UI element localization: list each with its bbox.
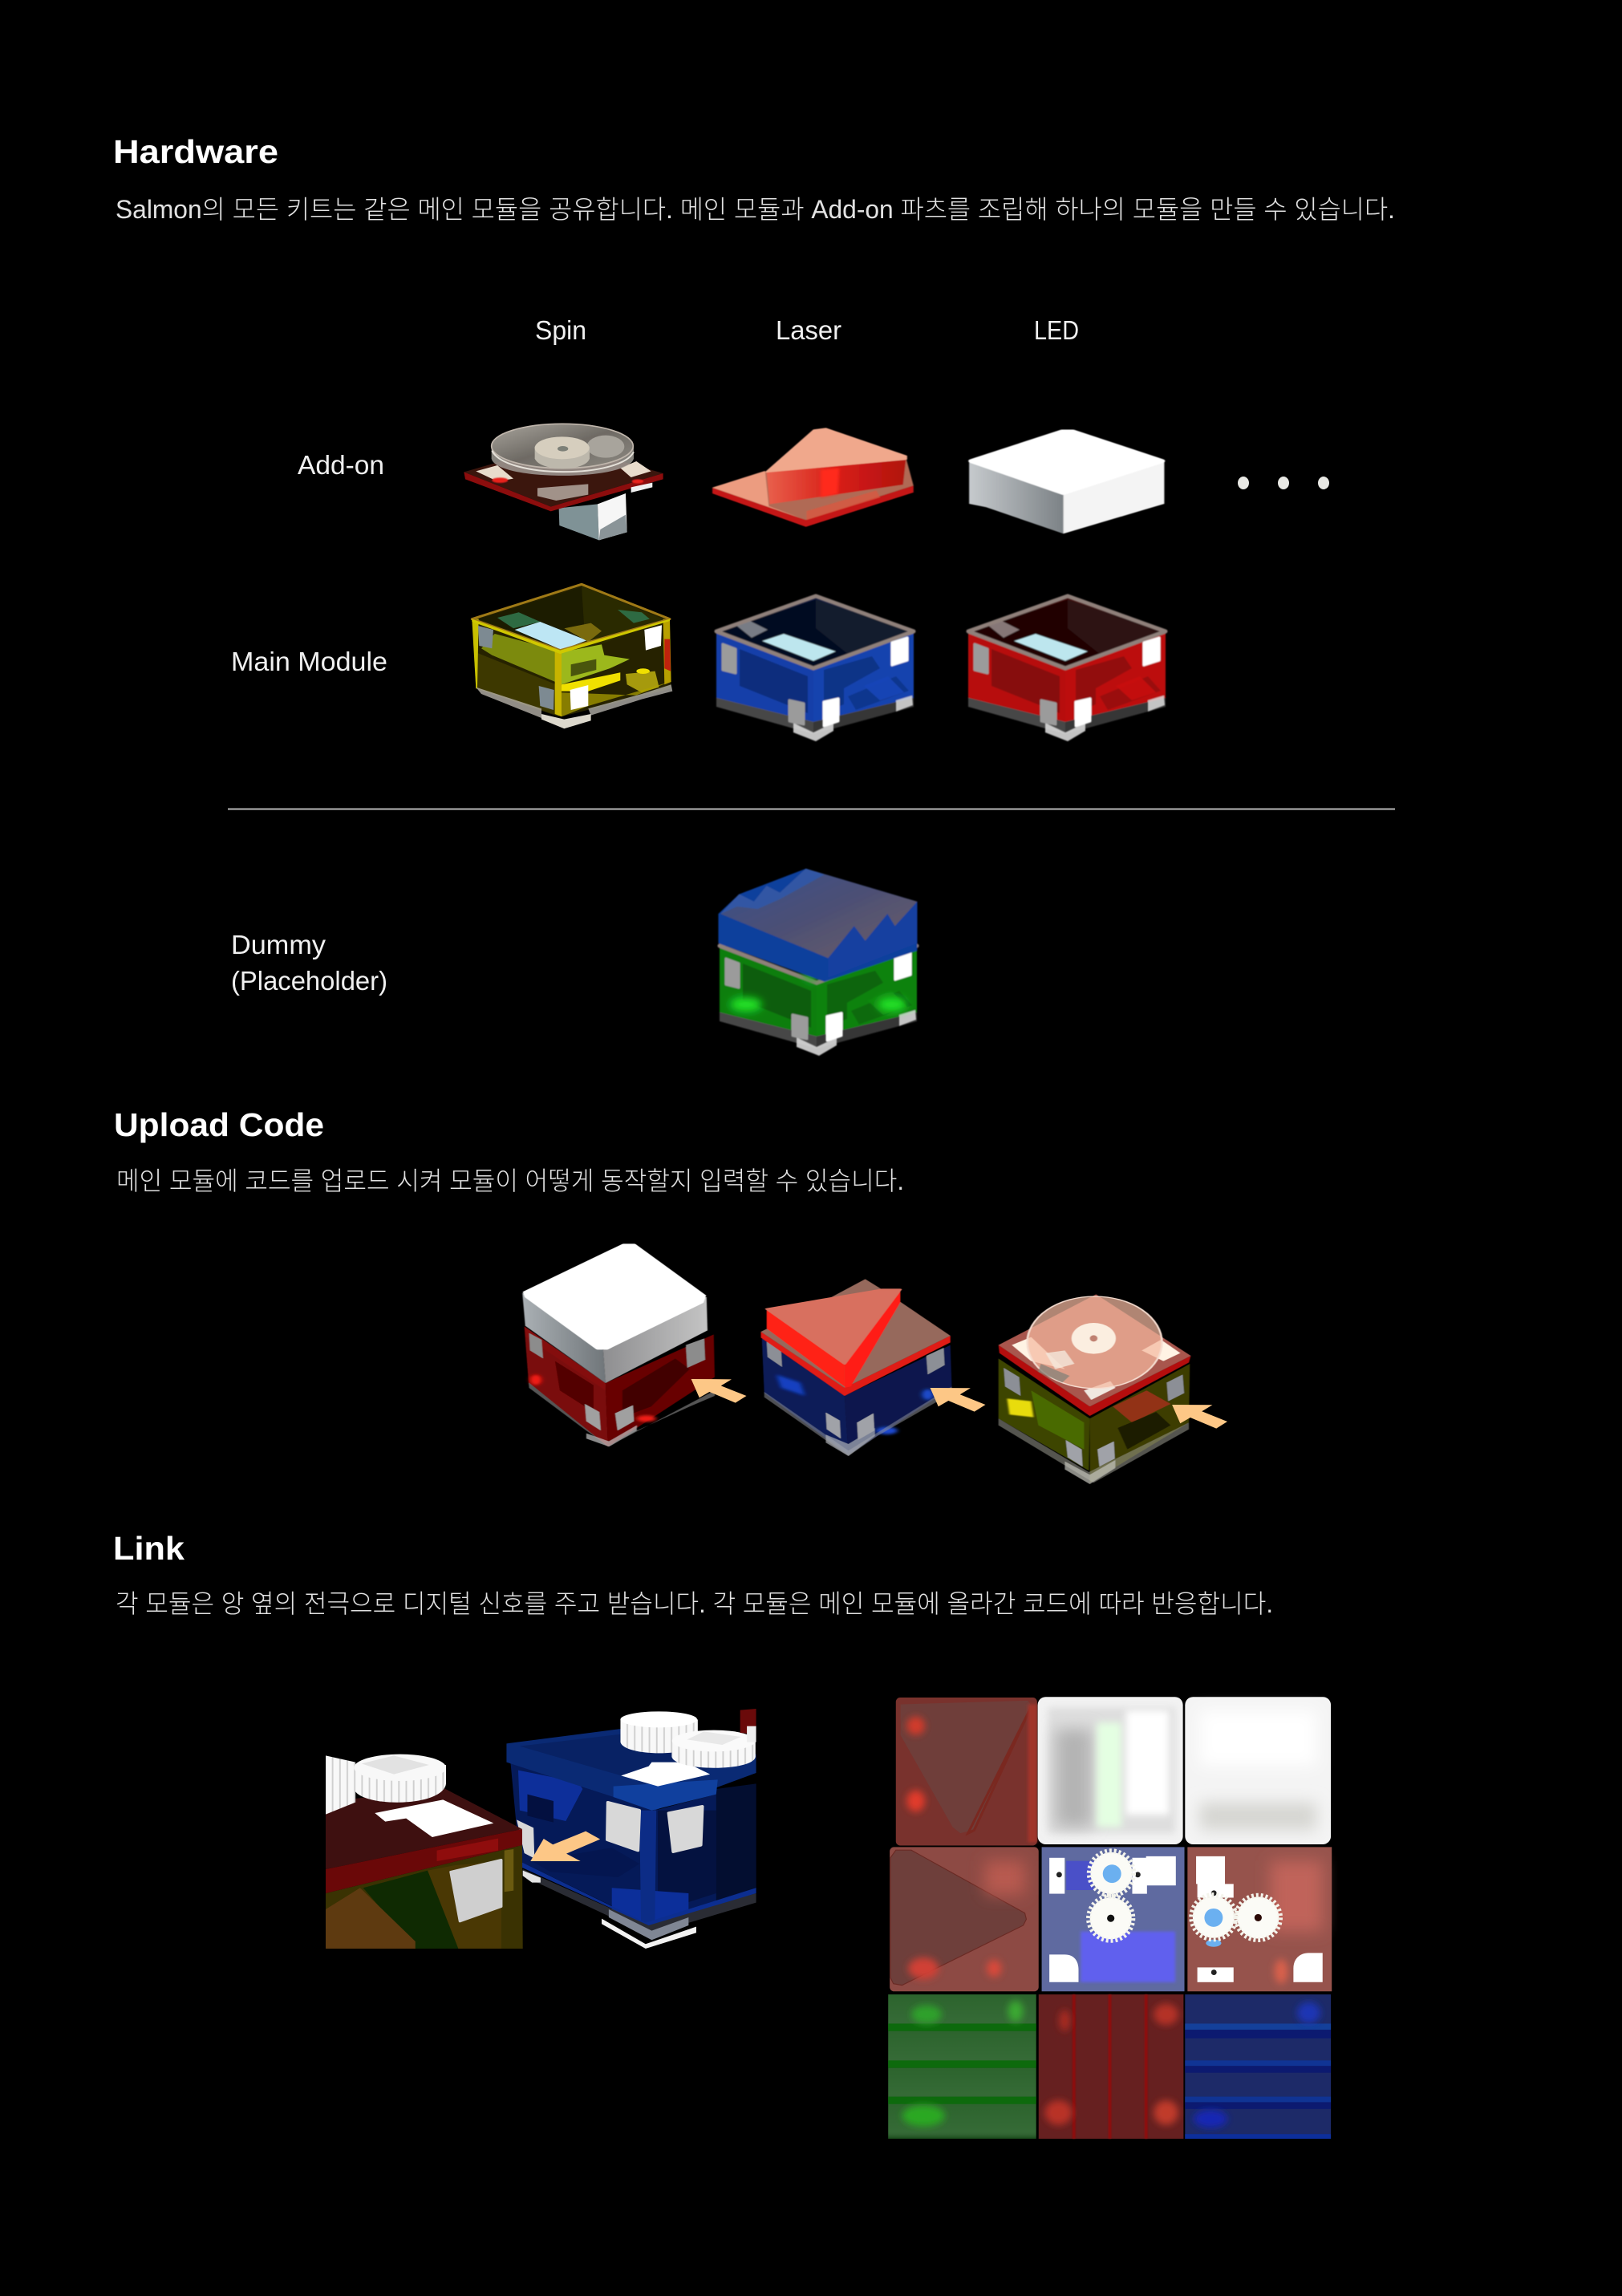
- link: close-up of two modules: [326, 1709, 756, 1949]
- column label: Spin: Spin: [535, 315, 586, 345]
- upload: spin + yellow module: [999, 1294, 1190, 1484]
- tile: red module with gears: [1187, 1847, 1332, 1991]
- add-on: LED: [969, 432, 1164, 533]
- arrow: [530, 1832, 600, 1861]
- tile: blue dummy top: [1185, 1994, 1331, 2139]
- row label: Main Module: Main Module: [231, 647, 387, 676]
- red and yellow module close-up: [326, 1754, 523, 1949]
- upload: LED + red module: [522, 1244, 715, 1446]
- row label: Dummy (Placeholder): (Placeholder): [231, 966, 387, 996]
- main module: yellow: [472, 584, 672, 728]
- column label: Laser: Laser: [776, 315, 841, 345]
- row label: Dummy (Placeholder): [231, 930, 387, 996]
- tile: dark red dummy top: [1039, 1994, 1183, 2139]
- arrow: [1172, 1405, 1227, 1429]
- tile: red laser top: [896, 1698, 1037, 1845]
- section: Link heading: Link: [113, 1530, 185, 1567]
- divider: [228, 809, 1395, 810]
- row label: Dummy (Placeholder): Dummy: [231, 930, 326, 959]
- add-on: Spin: [464, 424, 663, 540]
- blue module close-up: [506, 1709, 756, 1949]
- tile: red laser top rotated: [890, 1847, 1039, 1991]
- row label: Add-on: Add-on: [298, 450, 384, 480]
- main module: blue: [716, 596, 914, 741]
- arrow: [931, 1388, 985, 1412]
- upload: laser + blue module: [761, 1279, 952, 1456]
- arrow: [691, 1379, 747, 1403]
- tile: blue module with gears: [1042, 1847, 1185, 1991]
- tile: green dummy top: [888, 1994, 1036, 2139]
- column label: LED: LED: [1034, 315, 1079, 345]
- Upload Code description: 메인 모듈에 코드를 업로드 시켜 모듈이 어떻게 동작할지 입력할 수 있습니다.: [116, 1166, 904, 1195]
- link: top-view module grid: [888, 1697, 1332, 2139]
- section: Upload Code heading: Upload Code: [114, 1106, 324, 1143]
- tile: white LED top 2: [1185, 1697, 1331, 1844]
- add-on: Laser: [712, 428, 914, 527]
- ellipsis dots: [1238, 477, 1329, 489]
- Hardware description: Salmon의 모든 키트는 같은 메인 모듈을 공유합니다. 메인 모듈과 Add-on 파츠를 조립해 하나의 모듈을 만들 수 있습니다.: [116, 195, 1395, 224]
- section: Hardware heading: Hardware: [113, 133, 278, 170]
- main module: red: [968, 596, 1166, 741]
- dummy module: [718, 869, 917, 1056]
- tile: white LED top 1: [1038, 1697, 1183, 1844]
- Link description: 각 모듈은 앙 옆의 전극으로 디지털 신호를 주고 받습니다. 각 모듈은 메인 모듈에 올라간 코드에 따라 반응합니다.: [116, 1589, 1273, 1618]
